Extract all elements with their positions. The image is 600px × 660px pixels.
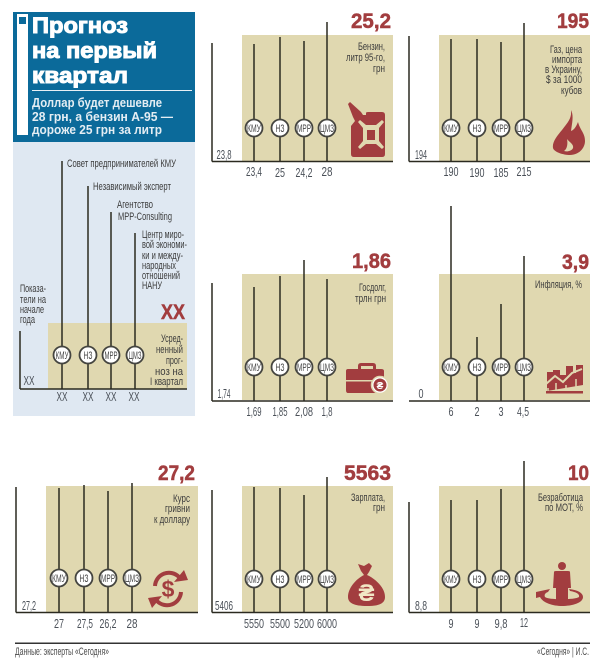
- icon: briefcase: ₴: [377, 381, 384, 392]
- markers: НЗ: [472, 123, 482, 135]
- description: [538, 492, 584, 514]
- title: на первый: [32, 38, 157, 63]
- values: 5550: [244, 617, 264, 631]
- values: [415, 599, 528, 631]
- expert labels: [67, 158, 187, 292]
- markers: ЦМЗ: [320, 362, 334, 374]
- icon: person on target: [536, 562, 583, 606]
- values: 12: [520, 616, 528, 630]
- title: [32, 13, 157, 88]
- values: [415, 148, 532, 180]
- expert labels: народных: [142, 260, 176, 272]
- markers: КМУ: [444, 362, 459, 374]
- values: 24,2: [296, 166, 313, 180]
- description: импорта: [552, 54, 583, 66]
- footer: [15, 642, 590, 658]
- chart: unemployment: [409, 461, 590, 631]
- values: 215: [516, 165, 532, 179]
- expert markers: НЗ: [84, 350, 93, 362]
- expert markers: [54, 346, 144, 364]
- description: гривни: [165, 503, 190, 515]
- description: кубов: [561, 85, 582, 97]
- values: 26,2: [100, 617, 117, 631]
- average forecast label: I квартал: [150, 376, 183, 388]
- markers: КМУ: [444, 123, 459, 135]
- value: 195: [557, 10, 589, 33]
- value: 1,86: [352, 250, 391, 273]
- values: 0: [418, 387, 424, 401]
- panel: legend: [13, 142, 195, 416]
- values: 5406: [215, 599, 233, 613]
- values: 194: [415, 148, 427, 162]
- average forecast label: [150, 333, 184, 388]
- markers: МРР: [101, 573, 115, 585]
- description: [351, 492, 385, 514]
- values: 6000: [317, 617, 337, 631]
- markers: ЦМЗ: [517, 574, 531, 586]
- subtitle: Доллар будет дешевле: [32, 96, 162, 110]
- description: Курс: [173, 493, 190, 505]
- value: 3,9: [562, 251, 589, 274]
- description: к доллару: [154, 514, 190, 526]
- expert labels: Независимый эксперт: [93, 181, 171, 193]
- values: 1,8: [322, 405, 333, 419]
- description: Газ, цена: [550, 44, 583, 56]
- expert labels: Совет предпринимателей КМУ: [67, 158, 177, 170]
- values: [218, 387, 333, 419]
- markers: [246, 120, 336, 136]
- average forecast label: ненный: [156, 344, 183, 356]
- values: 23,4: [246, 165, 262, 179]
- values: [215, 599, 337, 631]
- start indicators label: [20, 283, 47, 326]
- markers: [246, 358, 336, 376]
- expert markers: ЦМЗ: [128, 350, 142, 362]
- icon: dollar exchange: [148, 570, 188, 608]
- chart: state debt: [212, 250, 393, 419]
- icon: flame: [553, 110, 585, 155]
- values: [216, 148, 333, 180]
- expert markers: КМУ: [56, 350, 69, 362]
- expert labels: вой экономи-: [142, 239, 187, 251]
- description: по МОТ, %: [545, 502, 583, 514]
- expert markers: МРР: [104, 350, 118, 362]
- value: 25,2: [351, 10, 391, 33]
- markers: НЗ: [80, 573, 89, 585]
- expert labels: НАНУ: [142, 280, 163, 292]
- markers: МРР: [494, 123, 508, 135]
- start indicators label: года: [20, 314, 36, 326]
- values: 2,08: [295, 405, 313, 419]
- markers: НЗ: [276, 362, 285, 374]
- description: [545, 44, 583, 97]
- expert labels: ки и между-: [142, 250, 183, 262]
- values: 27: [54, 617, 64, 631]
- values: 27,5: [77, 617, 93, 631]
- markers: КМУ: [247, 123, 262, 135]
- description: Госдолг,: [359, 282, 386, 294]
- values: 5500: [270, 617, 290, 631]
- chart: gas: [409, 10, 590, 180]
- markers: КМУ: [247, 574, 262, 586]
- chart: exchange rate: [16, 462, 198, 631]
- subtitle: дороже 25 грн за литр: [32, 123, 162, 137]
- markers: КМУ: [52, 573, 67, 585]
- legend values: XX: [24, 374, 35, 388]
- icon: money bag: [348, 563, 385, 607]
- values: 23,8: [216, 148, 232, 162]
- values: [418, 387, 529, 419]
- markers: ЦМЗ: [320, 123, 334, 135]
- start indicators label: начале: [20, 304, 44, 316]
- expert labels: Агентство: [117, 199, 153, 211]
- values: 190: [444, 165, 459, 179]
- value: 10: [568, 462, 589, 485]
- value: 5563: [344, 462, 391, 485]
- legend values: [24, 374, 140, 404]
- markers: КМУ: [444, 574, 459, 586]
- expert labels: MPP-Consulting: [118, 211, 172, 223]
- values: 25: [275, 166, 285, 180]
- description: литр 95-го,: [346, 52, 385, 64]
- markers: МРР: [494, 574, 508, 586]
- values: 27,2: [22, 599, 36, 613]
- values: 5200: [294, 617, 314, 631]
- average forecast label: Усред-: [161, 333, 183, 345]
- header panel: [13, 12, 195, 142]
- legend values: XX: [128, 390, 140, 404]
- subtitle: 28 грн, а бензин А-95 —: [32, 110, 173, 124]
- subtitle: [32, 96, 173, 137]
- values: 9,8: [494, 617, 508, 631]
- title: Прогноз: [32, 13, 128, 38]
- start indicators label: Показа-: [20, 283, 46, 295]
- description: грн: [373, 63, 385, 75]
- values: 2: [474, 405, 480, 419]
- description: [355, 282, 386, 305]
- values: 9: [448, 617, 454, 631]
- markers: НЗ: [276, 574, 285, 586]
- markers: МРР: [297, 123, 311, 135]
- source: Данные: эксперты «Сегодня»: [15, 646, 109, 658]
- expert labels: отношений: [142, 270, 180, 282]
- markers: [442, 570, 532, 588]
- markers: НЗ: [472, 574, 482, 586]
- values: 28: [322, 165, 333, 179]
- values: 3: [498, 405, 504, 419]
- values: 8,8: [415, 599, 427, 613]
- markers: КМУ: [247, 362, 262, 374]
- description: $ за 1000: [546, 74, 582, 86]
- average forecast label: ноз на: [155, 366, 184, 378]
- values: 185: [494, 166, 509, 180]
- values: 1,85: [272, 405, 288, 419]
- description: Зарплата,: [351, 492, 385, 504]
- chart: salary: [212, 462, 393, 631]
- icon: petrol canister: [348, 102, 385, 157]
- icon: briefcase: [346, 363, 388, 394]
- values: 28: [126, 617, 138, 631]
- markers: [442, 120, 532, 136]
- markers: [442, 358, 532, 376]
- value: 27,2: [158, 462, 195, 485]
- description: в Украину,: [545, 64, 582, 76]
- legend values: XX: [106, 390, 117, 404]
- markers: [50, 570, 140, 586]
- description: трлн грн: [355, 293, 386, 305]
- values: 190: [470, 166, 485, 180]
- markers: [246, 570, 336, 588]
- average forecast value: XX: [161, 301, 185, 324]
- legend values: XX: [82, 390, 94, 404]
- icon: rising chart: [546, 365, 583, 394]
- values: 1,69: [246, 405, 262, 419]
- values: 1,74: [218, 387, 231, 401]
- markers: МРР: [297, 362, 311, 374]
- markers: МРР: [297, 574, 311, 586]
- description: грн: [373, 502, 385, 514]
- description: Бензин,: [358, 41, 385, 53]
- icon: dollar exchange: $: [162, 576, 175, 602]
- values: [22, 599, 138, 631]
- start indicators label: тели на: [20, 294, 47, 306]
- chart: inflation: [409, 206, 590, 419]
- markers: ЦМЗ: [320, 574, 334, 586]
- description: [346, 41, 385, 75]
- values: 6: [448, 405, 454, 419]
- values: 4,5: [517, 405, 529, 419]
- markers: МРР: [494, 362, 508, 374]
- icon: money bag: ₴: [358, 580, 375, 607]
- average forecast label: прог-: [166, 355, 183, 367]
- markers: ЦМЗ: [517, 362, 531, 374]
- description: [154, 493, 190, 526]
- title: квартал: [32, 63, 128, 88]
- expert labels: Центр миро-: [142, 229, 184, 241]
- markers: НЗ: [276, 123, 285, 135]
- markers: ЦМЗ: [517, 123, 531, 135]
- markers: ЦМЗ: [125, 573, 139, 585]
- legend values: XX: [56, 390, 68, 404]
- values: 9: [474, 617, 480, 631]
- chart: petrol: [212, 10, 393, 180]
- markers: НЗ: [472, 362, 482, 374]
